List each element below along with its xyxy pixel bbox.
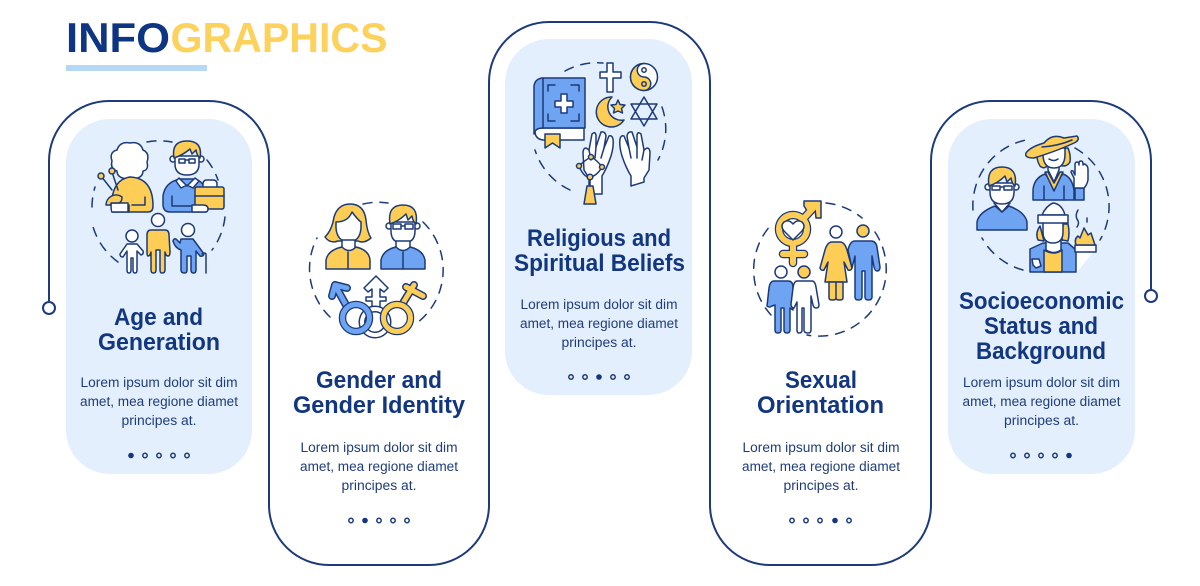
gender symbol with heart — [779, 201, 821, 263]
pagination dots — [1011, 453, 1072, 458]
heading: Sexual — [785, 367, 857, 394]
child — [120, 230, 143, 273]
heading: Background — [976, 338, 1106, 365]
body text: amet, mea regione diamet — [742, 459, 900, 474]
body text — [742, 440, 900, 493]
star of david — [631, 97, 657, 126]
pagination dots — [128, 453, 189, 458]
heading: Socioeconomic — [959, 288, 1124, 315]
body text: principes at. — [784, 478, 858, 493]
white man in pair — [791, 266, 819, 333]
title — [66, 14, 388, 61]
heading — [293, 367, 466, 419]
panel: age and generation — [66, 119, 252, 474]
body text: Lorem ipsum dolor sit dim — [742, 440, 900, 455]
body text: amet, mea regione diamet — [300, 459, 458, 474]
heading — [959, 288, 1124, 365]
heading: Status and — [984, 313, 1098, 340]
title: GRAPHICS — [170, 14, 388, 61]
man — [381, 205, 425, 269]
body text: amet, mea regione diamet — [962, 394, 1121, 409]
body text — [300, 440, 458, 493]
card background — [505, 39, 692, 395]
body text: amet, mea regione diamet — [80, 394, 238, 409]
icon: religions — [534, 63, 666, 204]
body text: principes at. — [1004, 413, 1079, 428]
panel: sexual orientation — [742, 201, 900, 523]
older person with cane — [173, 224, 206, 273]
praying hand with beads — [576, 132, 613, 204]
blue man in pair — [767, 266, 793, 333]
panel: gender and gender identity — [293, 202, 466, 523]
woman in couple — [820, 226, 852, 300]
man with briefcase — [163, 141, 224, 212]
panel: religious and spiritual beliefs — [505, 39, 692, 395]
body text — [962, 375, 1121, 428]
pagination dots — [349, 518, 409, 523]
grandmother — [98, 143, 153, 212]
icon: social classes — [973, 136, 1109, 272]
symbol: male — [332, 285, 347, 305]
icon: gender identity — [310, 202, 443, 335]
yin yang — [630, 64, 658, 90]
woman — [325, 204, 371, 269]
heading — [757, 367, 884, 419]
holy book — [534, 78, 585, 148]
man in couple — [848, 225, 880, 300]
heading — [98, 304, 220, 356]
heading — [514, 225, 685, 277]
pagination dots — [569, 374, 629, 380]
body text: Lorem ipsum dolor sit dim — [963, 375, 1120, 390]
card background — [66, 119, 252, 474]
icon: generations — [92, 141, 225, 273]
body text: Lorem ipsum dolor sit dim — [300, 440, 458, 455]
homeless person — [1030, 203, 1096, 272]
crescent and star — [596, 97, 625, 127]
wealthy woman with hat — [1026, 136, 1088, 200]
heading: Gender and — [316, 367, 442, 394]
heading: Generation — [98, 329, 220, 356]
body text: principes at. — [562, 335, 636, 350]
body text: Lorem ipsum dolor sit dim — [80, 375, 238, 390]
open hand — [620, 132, 650, 188]
title: INFO — [66, 14, 170, 61]
interlocked rings — [342, 304, 410, 335]
cross — [600, 63, 621, 92]
heading: Religious and — [527, 225, 671, 252]
panel: socioeconomic status — [948, 119, 1135, 474]
pagination dots — [790, 518, 851, 523]
heading: Age and — [114, 304, 203, 331]
body text: principes at. — [122, 413, 196, 428]
body text: amet, mea regione diamet — [520, 316, 678, 331]
title underline — [66, 65, 207, 71]
body text: principes at. — [342, 478, 416, 493]
symbol: female — [403, 285, 423, 303]
body text — [520, 297, 678, 350]
symbol: transgender — [364, 276, 388, 308]
man with glasses — [977, 167, 1027, 230]
icon: couples — [754, 201, 886, 336]
body text: Lorem ipsum dolor sit dim — [520, 297, 678, 312]
card background — [948, 119, 1135, 474]
heading: Spiritual Beliefs — [514, 250, 685, 277]
heading: Gender Identity — [293, 392, 466, 419]
adult — [147, 214, 170, 273]
heading: Orientation — [757, 392, 884, 419]
body text — [80, 375, 238, 428]
